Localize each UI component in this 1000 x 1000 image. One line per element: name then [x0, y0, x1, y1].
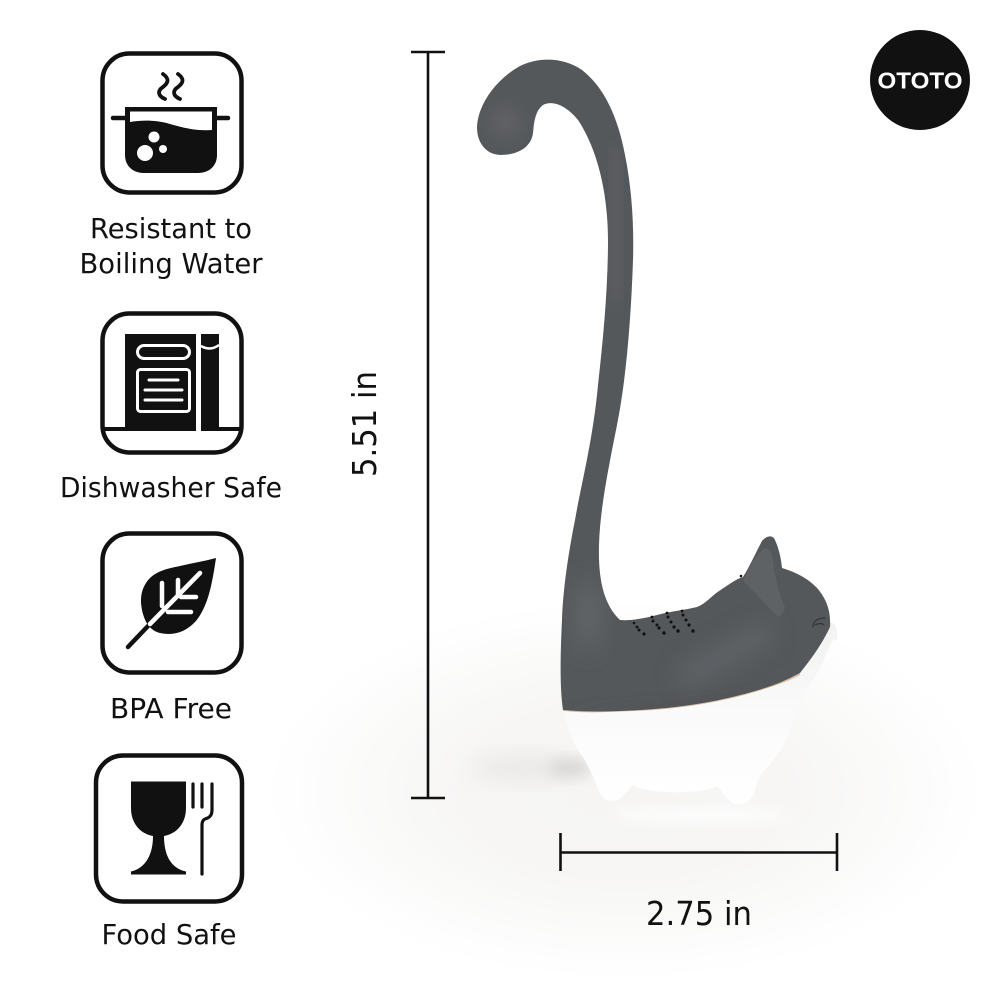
air holes — [633, 575, 742, 636]
product: cat tea infuser — [477, 60, 838, 804]
label: Resistant to Boiling Water: Resistant to — [90, 212, 252, 245]
label: height 5.51 in: 5.51 in — [345, 371, 384, 477]
body shading — [497, 114, 746, 710]
dimension: height arrow — [411, 52, 445, 798]
background floor glow — [265, 600, 985, 980]
logo: OTOTO: OTOTO — [878, 68, 962, 94]
icon: boiling pot — [102, 54, 242, 192]
label: width 2.75 in: 2.75 in — [646, 894, 752, 933]
label: Food Safe: Food Safe — [102, 918, 236, 951]
dimension: width arrow — [560, 833, 837, 871]
nose — [830, 631, 838, 641]
label: Dishwasher Safe: Dishwasher Safe — [60, 471, 282, 504]
front ear — [743, 548, 785, 617]
white lower body — [563, 623, 837, 804]
peach seam — [563, 674, 800, 712]
icon: leaf — [102, 534, 242, 672]
label: Resistant to Boiling Water — [80, 212, 263, 280]
logo: OTOTO — [870, 30, 970, 130]
icon: food safe glass and fork — [96, 756, 242, 902]
grey body and tail — [477, 60, 830, 711]
label: BPA Free: BPA Free — [110, 692, 232, 725]
label: Resistant to Boiling Water: Boiling Water — [80, 247, 263, 280]
closed eye — [813, 618, 825, 627]
icon: dishwasher — [102, 314, 242, 452]
